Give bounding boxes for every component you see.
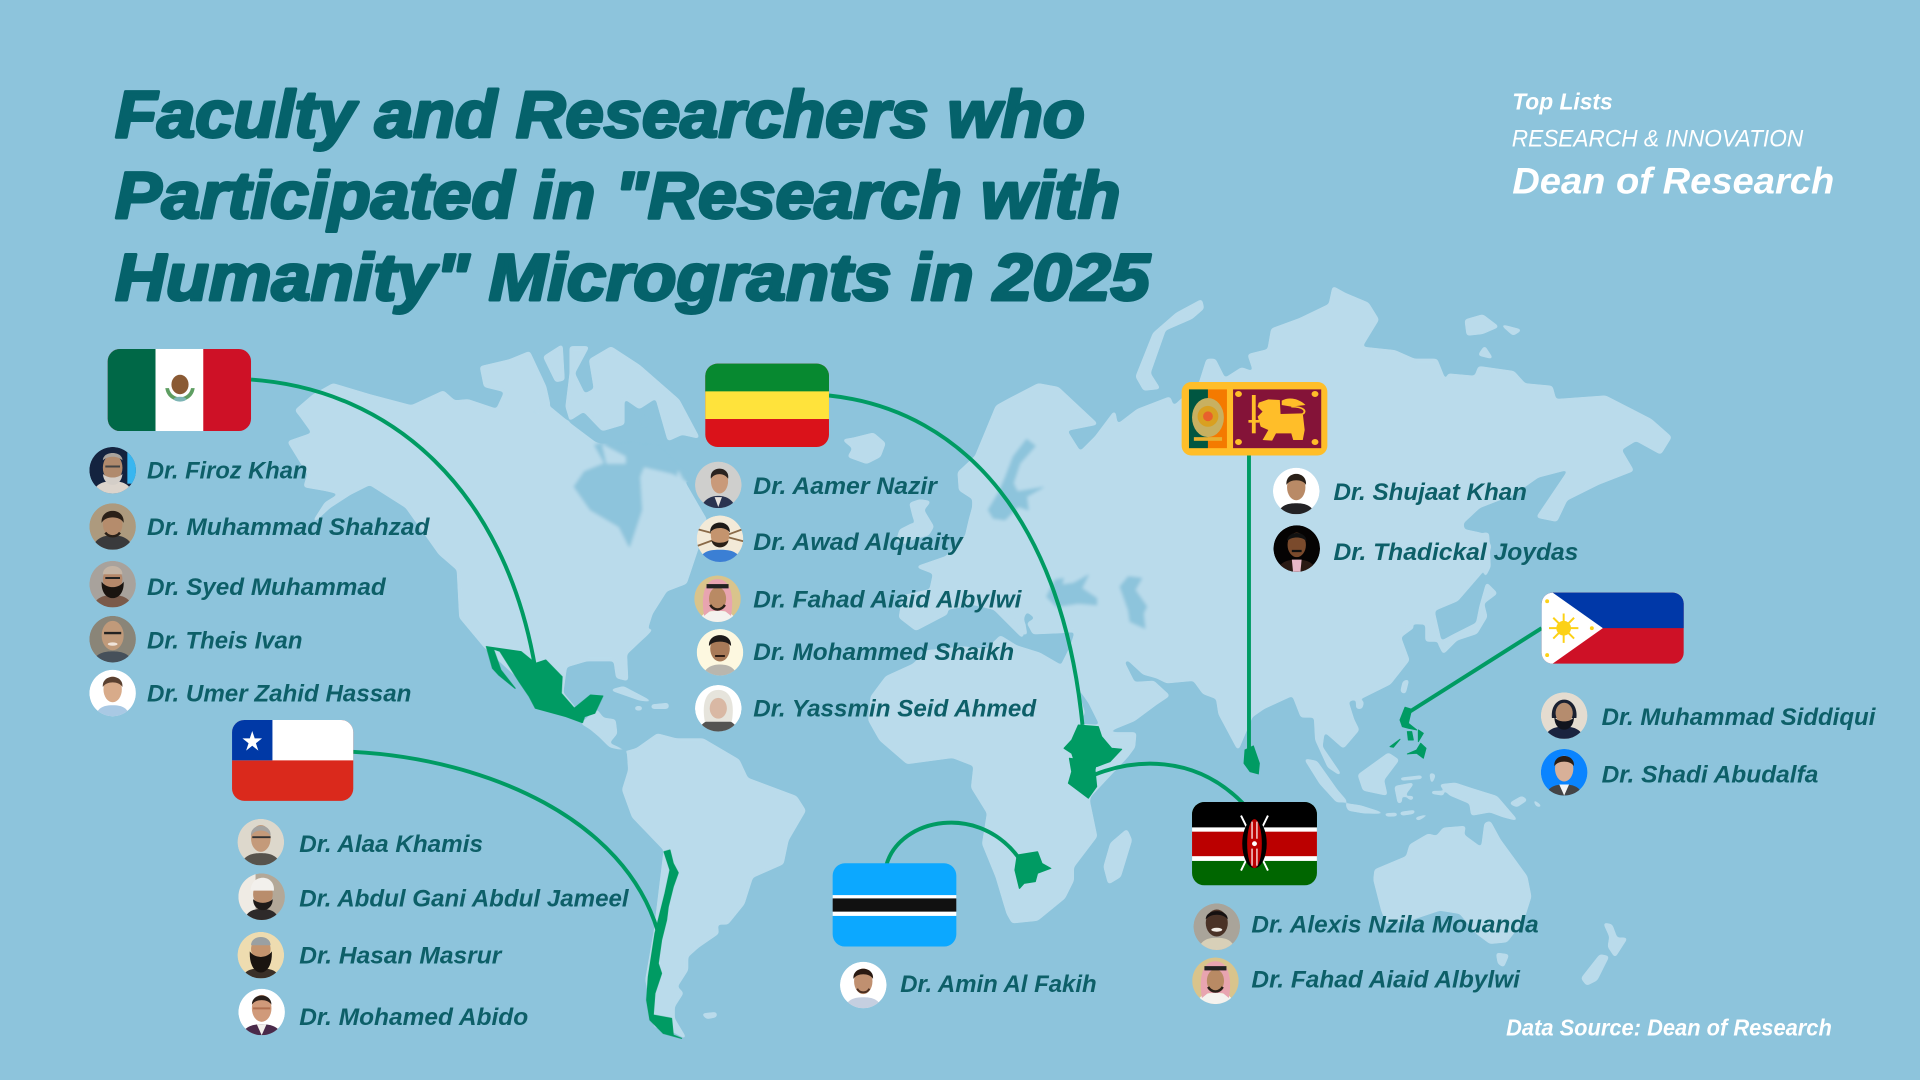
title: Faculty and Researchers who xyxy=(115,78,1085,151)
person: Dr. Umer Zahid Hassan: Dr. Umer Zahid Hassan xyxy=(147,681,411,708)
person: Dr. Muhammad Siddiqui: Dr. Muhammad Siddiqui xyxy=(1602,704,1877,731)
country: Botswana xyxy=(1015,852,1051,888)
Southeast Asia, Australia, New Zealand xyxy=(1305,753,1627,985)
person: Dr. Hasan Masrur xyxy=(238,932,503,978)
person: Dr. Aamer Nazir xyxy=(695,462,938,508)
South America xyxy=(623,735,804,1037)
person: Dr. Syed Muhammad xyxy=(89,561,387,607)
person: Dr. Fahad Aiaid Albylwi: Dr. Fahad Aiaid Albylwi xyxy=(753,586,1023,613)
group: Philippines researchers xyxy=(1541,692,1877,796)
flag: Kenya xyxy=(1192,802,1317,885)
group: Mexico researchers xyxy=(89,447,430,716)
flag: Philippines xyxy=(1542,593,1684,664)
person: Dr. Muhammad Siddiqui xyxy=(1541,692,1877,739)
country: Philippines xyxy=(1390,707,1426,758)
flag: Sri Lanka xyxy=(1182,382,1327,456)
person: Dr. Amin Al Fakih: Dr. Amin Al Fakih xyxy=(900,971,1097,998)
person: Dr. Theis Ivan: Dr. Theis Ivan xyxy=(147,627,302,654)
inland seas and Baltic xyxy=(1047,575,1147,628)
Japan, Taiwan, Hainan, Sakhalin xyxy=(1357,533,1497,708)
person: Dr. Awad Alquaity: Dr. Awad Alquaity xyxy=(753,529,964,556)
title: Participated in "Research with xyxy=(115,159,1120,232)
person: Dr. Abdul Gani Abdul Jameel: Dr. Abdul Gani Abdul Jameel xyxy=(299,886,630,913)
person: Dr. Firoz Khan xyxy=(89,447,307,493)
highlighted countries xyxy=(486,647,1426,1038)
Africa xyxy=(869,637,1135,922)
person: Dr. Yassmin Seid Ahmed: Dr. Yassmin Seid Ahmed xyxy=(753,696,1037,723)
arrow: Ethiopia flag to Ethiopia xyxy=(829,396,1082,725)
person: Dr. Mohammed Shaikh xyxy=(697,629,1014,676)
flag: Ethiopia xyxy=(705,364,829,447)
person: Dr. Mohamed Abido xyxy=(238,989,528,1035)
person: Dr. Mohammed Shaikh: Dr. Mohammed Shaikh xyxy=(753,639,1014,666)
person: Dr. Aamer Nazir: Dr. Aamer Nazir xyxy=(753,473,938,500)
group: Chile researchers xyxy=(238,819,630,1035)
person: Dr. Amin Al Fakih xyxy=(840,962,1097,1008)
person: Dr. Hasan Masrur: Dr. Hasan Masrur xyxy=(299,942,503,969)
Central America xyxy=(582,710,628,752)
person: Dr. Alaa Khamis xyxy=(238,819,483,865)
flag: Mexico xyxy=(108,349,251,431)
person: Dr. Mohamed Abido: Dr. Mohamed Abido xyxy=(299,1004,528,1031)
person: Dr. Muhammad Shahzad xyxy=(89,503,430,550)
person: Dr. Shujaat Khan xyxy=(1273,468,1527,514)
person: Dr. Muhammad Shahzad: Dr. Muhammad Shahzad xyxy=(147,514,430,541)
person: Dr. Fahad Aiaid Albylwi (Kenya): Dr. Fahad Aiaid Albylwi xyxy=(1251,966,1521,993)
person: Dr. Alexis Nzila Mouanda xyxy=(1194,903,1539,950)
group: Ethiopia researchers xyxy=(694,462,1037,732)
header block: Top Lists: Top Lists xyxy=(1512,88,1613,114)
Eurasia xyxy=(900,288,1670,774)
header block: Top Lists: RESEARCH & INNOVATION xyxy=(1512,126,1804,153)
arrow: Philippines flag to Philippines xyxy=(1408,628,1542,713)
group: Botswana researcher xyxy=(840,962,1097,1008)
arrow: Kenya flag to Kenya xyxy=(1093,764,1243,803)
person: Dr. Fahad Aiaid Albylwi xyxy=(694,576,1023,622)
title xyxy=(115,78,1151,314)
world map background xyxy=(289,288,1670,1037)
person: Dr. Theis Ivan xyxy=(89,616,302,662)
flag: Chile xyxy=(232,720,353,801)
data source: Data Source: Dean of Research xyxy=(1506,1014,1832,1040)
person: Dr. Alaa Khamis: Dr. Alaa Khamis xyxy=(299,831,483,858)
arrow: Chile flag to Chile xyxy=(353,752,658,931)
person: Dr. Yassmin Seid Ahmed xyxy=(695,685,1037,732)
person: Dr. Shadi Abudalfa: Dr. Shadi Abudalfa xyxy=(1602,761,1818,788)
person: Dr. Alexis Nzila Mouanda: Dr. Alexis Nzila Mouanda xyxy=(1251,912,1539,939)
country: Mexico xyxy=(486,647,603,723)
North America xyxy=(289,345,705,710)
Arctic islands xyxy=(1136,300,1521,390)
person: Dr. Shujaat Khan: Dr. Shujaat Khan xyxy=(1333,479,1527,506)
person: Dr. Syed Muhammad: Dr. Syed Muhammad xyxy=(147,574,387,601)
person: Dr. Thadickal Joydas xyxy=(1273,525,1578,572)
arrow: Botswana flag to Botswana xyxy=(887,823,1020,864)
person: Dr. Shadi Abudalfa xyxy=(1541,749,1818,796)
title: Humanity" Microgrants in 2025 xyxy=(115,241,1151,314)
country: Ethiopia xyxy=(1064,725,1122,767)
person: Dr. Umer Zahid Hassan xyxy=(89,670,411,716)
group: Sri Lanka researchers xyxy=(1273,468,1578,572)
country: Kenya xyxy=(1068,758,1097,798)
header block: Top Lists: Dean of Research xyxy=(1512,160,1834,201)
country: Sri Lanka xyxy=(1244,746,1259,774)
country: Chile xyxy=(647,850,682,1038)
person: Dr. Awad Alquaity xyxy=(697,516,964,562)
person: Dr. Thadickal Joydas: Dr. Thadickal Joydas xyxy=(1333,539,1578,566)
group: Kenya researchers xyxy=(1192,903,1539,1004)
flag: Botswana xyxy=(833,863,956,947)
person: Dr. Fahad Aiaid Albylwi (Kenya) xyxy=(1192,958,1521,1004)
person: Dr. Abdul Gani Abdul Jameel xyxy=(238,873,630,920)
person: Dr. Firoz Khan: Dr. Firoz Khan xyxy=(147,457,307,484)
arrow: Sri Lanka flag to Sri Lanka xyxy=(1247,453,1251,749)
UK, Ireland and Iceland xyxy=(843,433,933,543)
header block: Top Lists xyxy=(1512,88,1834,201)
arrow: Mexico flag to Mexico xyxy=(251,380,535,667)
Madagascar and Falklands xyxy=(703,830,1131,1018)
